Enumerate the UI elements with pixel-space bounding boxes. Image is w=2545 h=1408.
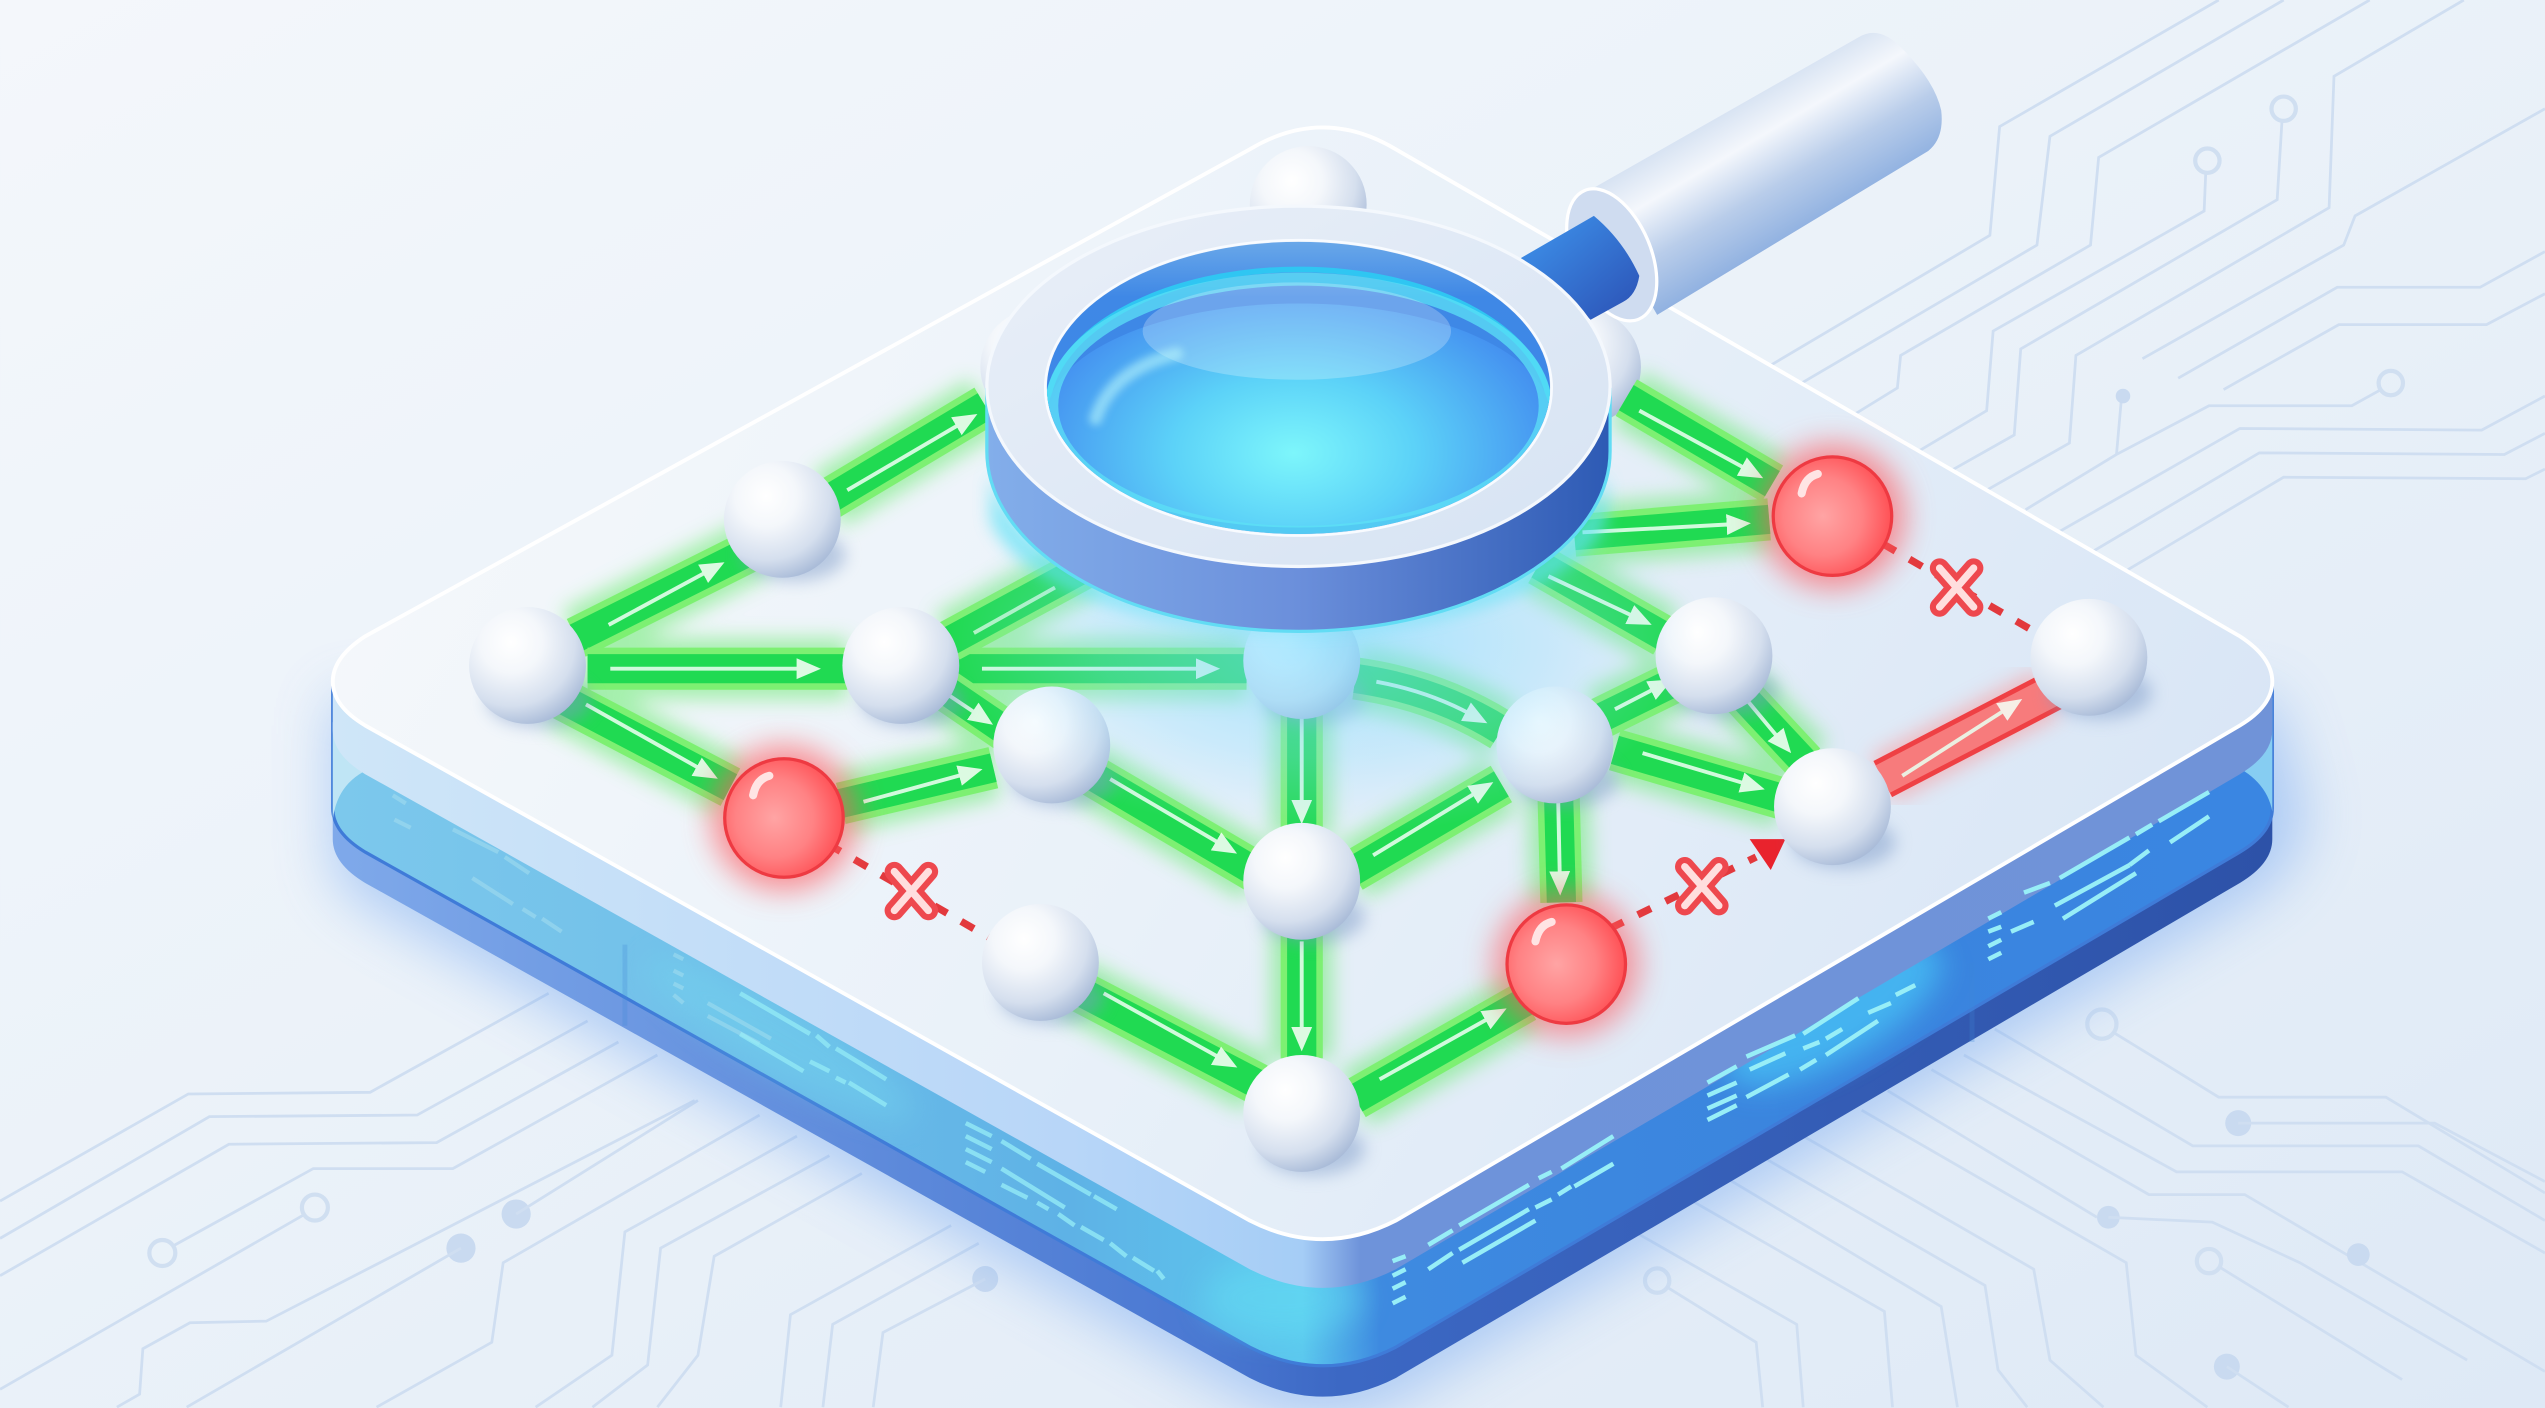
edge 3 [588, 656, 847, 682]
node bluish [1496, 687, 1618, 807]
broken links [828, 544, 2037, 938]
upper highlight [1143, 282, 1451, 380]
platform [333, 127, 2272, 1397]
cyan inner band [1047, 266, 1550, 410]
top surface [333, 127, 2272, 1239]
node [993, 687, 1115, 807]
edge 14 [1071, 987, 1258, 1084]
lens glow on platform [950, 446, 1696, 836]
node [2030, 599, 2152, 719]
dome [1047, 304, 1550, 527]
lens body wall [987, 390, 1610, 631]
node under lens [1243, 602, 1365, 724]
white nodes [469, 461, 2152, 1175]
data lines: left face [393, 795, 1164, 1279]
edge 7 [933, 682, 1010, 734]
node [724, 461, 846, 581]
node [1243, 1055, 1365, 1175]
inner wall [1039, 235, 1558, 544]
curved glint [1096, 354, 1177, 419]
glass layer [333, 682, 2272, 1366]
edge 20 [1539, 565, 1664, 636]
edge glow [560, 398, 1805, 1099]
platform shadow [333, 698, 2305, 1408]
edge 16 [1558, 779, 1561, 902]
glass rim [1045, 240, 1552, 536]
glass light corner left [333, 722, 425, 820]
red edge glow [1883, 693, 2048, 779]
glass light corner right [2183, 698, 2272, 812]
dome bottom band [1052, 279, 1545, 532]
base layer [333, 682, 2272, 1397]
edge 12 curved [1355, 678, 1501, 730]
green arrow edges [560, 398, 1805, 1099]
glass glow [629, 914, 1962, 1337]
broken link upper right [1883, 544, 2037, 633]
edge 2 [828, 406, 985, 500]
ring [987, 206, 1610, 566]
edge 6 [950, 568, 1084, 641]
data lines: right face [1393, 792, 2209, 1303]
edge 10 [1289, 698, 1315, 836]
edge 22 [1574, 519, 1769, 536]
circuit traces: lower left [0, 993, 998, 1407]
edge 15 [1355, 1001, 1526, 1099]
edge 1 [576, 549, 755, 638]
red node top right [1759, 443, 1905, 589]
lens under glow [990, 471, 1607, 631]
edge 11 [1352, 784, 1501, 872]
back nodes behind magnifier [980, 146, 1641, 425]
circuit traces: lower right [1638, 1010, 2545, 1407]
lens glass [1046, 242, 1550, 534]
circuit traces: upper right [1771, 0, 2545, 570]
edge 9 [1084, 771, 1258, 873]
edge 13 [1289, 922, 1315, 1058]
edge 18 [1737, 690, 1805, 763]
broken link left [828, 844, 990, 938]
handle collar [1549, 175, 1675, 334]
edge 17 [1599, 677, 1685, 719]
red node centre [1493, 891, 1639, 1037]
red node left [711, 745, 857, 891]
red nodes [711, 443, 1905, 1037]
edge 4 [560, 698, 730, 787]
broken link centre [1610, 839, 1785, 928]
node [842, 607, 964, 727]
panel separators [625, 945, 1972, 1042]
node [1243, 823, 1365, 943]
red arrow edge [1883, 690, 2055, 779]
handle [1587, 33, 1942, 315]
edge 19 [1615, 750, 1782, 799]
upper lip [333, 682, 2272, 1288]
edge 5 [958, 656, 1247, 682]
ferrule [1521, 216, 1639, 320]
node [469, 607, 591, 727]
edge 8 [841, 768, 993, 803]
node [1656, 597, 1777, 717]
node [982, 904, 1104, 1024]
edge 21 [1626, 398, 1772, 484]
magnifying glass [987, 33, 1942, 631]
node [1774, 748, 1896, 868]
